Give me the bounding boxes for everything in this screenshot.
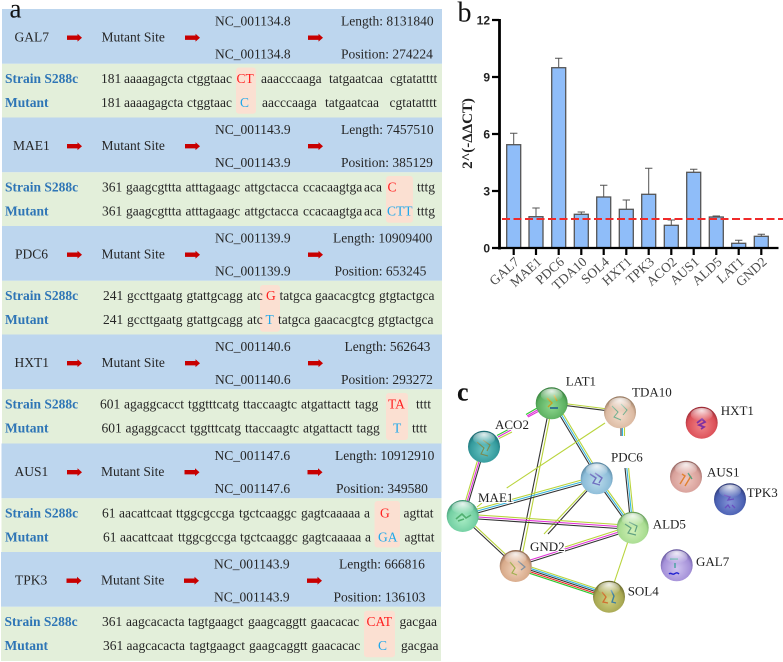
gene block: PDC6: Position: 653245	[334, 263, 427, 278]
panel c: protein interaction network	[447, 374, 778, 613]
gene block: TPK3	[1, 552, 441, 661]
gene block: PDC6: gccttgaatg	[127, 312, 183, 327]
gene block: GAL7: cgtatatttt	[390, 71, 437, 86]
gene block: GAL7: CT	[236, 71, 255, 86]
gene block: PDC6: atc	[247, 288, 263, 303]
gene block: HXT1: HXT1	[14, 355, 49, 370]
node labels	[478, 374, 778, 599]
gene block: HXT1: ttaccaagtc	[245, 420, 299, 436]
gene block: TPK3: Mutant	[4, 638, 49, 653]
y axis with ticks: 0	[483, 241, 490, 255]
gene block: MAE1: Position: 385129	[341, 155, 433, 170]
gene block: HXT1: tagg	[356, 420, 380, 436]
gene block: AUS1: ttggcgccga	[176, 506, 234, 520]
x axis with ticks	[498, 248, 778, 255]
network edges	[461, 402, 635, 600]
gene block: HXT1: agaggcacct	[124, 396, 184, 412]
node: ALD5	[617, 512, 649, 544]
x axis gene labels: SOL4	[578, 254, 612, 287]
gene block: MAE1: ccacaagtga	[303, 180, 362, 194]
gene block: MAE1: Strain S288c	[5, 180, 78, 194]
gene block: GAL7: NC_001134.8	[215, 14, 291, 28]
gene block: AUS1: NC_001147.6	[214, 448, 290, 463]
gene block: AUS1: agttat	[404, 530, 435, 544]
gene block: GAL7: 181	[101, 95, 121, 110]
gene block: GAL7: 181	[101, 71, 121, 86]
gene block: AUS1: a	[364, 506, 370, 520]
gene block: MAE1: aca	[364, 180, 382, 194]
gene block: TPK3: CAT	[366, 614, 393, 629]
gene block: TPK3: NC_001143.9	[214, 556, 290, 572]
gene block: PDC6: NC_001139.9	[215, 263, 291, 278]
gene block: AUS1: aacattcaat	[120, 530, 173, 544]
gene block: GAL7: tatgaatcaa	[329, 71, 383, 86]
node labels: SOL4	[628, 584, 659, 599]
gene block: HXT1: Mutant Site	[102, 355, 165, 370]
node: GAL7	[661, 549, 693, 581]
node: GND2	[500, 550, 532, 582]
gene block: HXT1: ttaccaagtc	[243, 396, 297, 412]
gene block: TPK3: Strain S288c	[4, 614, 78, 629]
gene block: AUS1: Length: 10912910	[335, 448, 435, 463]
gene block: AUS1: aacattcaat	[119, 506, 172, 520]
gene block: GAL7	[2, 9, 442, 118]
gene block: TPK3: tagtgaagct	[190, 638, 245, 653]
node: ACO2	[468, 431, 500, 463]
gene block: GAL7: aaaagagcta	[124, 71, 183, 86]
x axis gene labels: TDA10	[549, 254, 590, 293]
gene block: HXT1	[2, 334, 442, 444]
node labels: HXT1	[721, 403, 754, 418]
node: LAT1	[536, 387, 568, 419]
gene block: PDC6: T	[266, 312, 274, 327]
gene block: HXT1: NC_001140.6	[215, 372, 291, 387]
gene block: MAE1: atttagaagc	[186, 204, 240, 218]
node labels: GAL7	[696, 554, 730, 569]
gene block: AUS1: 61	[102, 506, 116, 520]
node labels: TPK3	[747, 485, 778, 500]
gene block: PDC6: gtattgcagg	[186, 312, 243, 327]
gene block: AUS1: agttat	[404, 506, 434, 520]
node: PDC6	[581, 462, 613, 494]
gene block: HXT1: 601	[102, 420, 122, 436]
gene block: PDC6: gtgtactgca	[379, 288, 434, 303]
gene block: MAE1: tttg	[417, 204, 435, 218]
gene block: HXT1: T	[393, 420, 402, 436]
panel letter c: c	[457, 378, 469, 407]
gene block: HXT1: tggtttcatg	[190, 420, 241, 436]
gene block: MAE1: Length: 7457510	[341, 122, 434, 137]
node labels: PDC6	[611, 450, 643, 465]
gene block: MAE1: Mutant	[5, 204, 49, 218]
panel a: mutation sites	[1, 9, 442, 661]
gene block: AUS1: G	[380, 506, 390, 520]
y axis with ticks: 12	[477, 13, 490, 27]
gene block: PDC6: 241	[103, 288, 123, 303]
gene block: PDC6	[2, 226, 442, 334]
x axis gene labels: TPK3	[623, 254, 657, 287]
gene block: HXT1: agaggcacct	[126, 420, 186, 436]
gene block: HXT1: 601	[100, 396, 120, 412]
gene block: HXT1: NC_001140.6	[215, 339, 291, 354]
gene block: PDC6: gaacacgtcg	[315, 288, 375, 303]
gene block: GAL7: aaacccaaga	[261, 71, 322, 86]
gene block: PDC6: Mutant	[5, 312, 49, 327]
gene block: GAL7: cgtatatttt	[390, 95, 437, 110]
gene block: PDC6: Mutant Site	[102, 246, 165, 262]
gene block: HXT1: atgattactt	[303, 420, 353, 436]
gene block: TPK3: gaacacac	[312, 638, 360, 653]
gene block: MAE1: Mutant Site	[102, 138, 165, 153]
gene block: GAL7: tatgaatcaa	[325, 95, 379, 110]
gene block: TPK3: aagcacacta	[126, 614, 184, 629]
node labels: ALD5	[653, 517, 686, 532]
gene block: MAE1: MAE1	[13, 138, 50, 153]
node labels: GND2	[530, 539, 565, 554]
gene block: MAE1: gaagcgttta	[126, 180, 181, 194]
gene block: TPK3: aagcacacta	[126, 638, 185, 653]
node: TPK3	[714, 483, 746, 515]
y axis with ticks: 9	[483, 70, 490, 84]
threshold dashed line	[502, 218, 783, 220]
node: SOL4	[593, 581, 625, 613]
gene block: HXT1: tttt	[412, 420, 427, 436]
gene block: HXT1: tagg	[355, 396, 378, 412]
gene block: GAL7: Strain S288c	[5, 71, 78, 86]
x axis gene labels: ALD5	[689, 254, 725, 288]
x axis gene labels: HXT1	[599, 254, 635, 288]
gene block: MAE1: gaagcgttta	[126, 204, 181, 218]
node: MAE1	[447, 500, 479, 532]
gene block: PDC6: gtattgcagg	[186, 288, 243, 303]
gene block: TPK3: Position: 136103	[334, 589, 426, 604]
gene block: MAE1: atttagaagc	[186, 180, 240, 194]
gene block: MAE1	[2, 118, 442, 226]
node: TDA10	[604, 396, 636, 428]
node labels: MAE1	[478, 490, 513, 505]
gene block: AUS1: AUS1	[14, 464, 48, 479]
gene block: TPK3: tagtgaagct	[188, 614, 244, 629]
y axis title: 2^(-ΔΔCT)	[460, 98, 476, 169]
x axis gene labels	[486, 254, 770, 293]
gene block: MAE1: 361	[102, 180, 122, 194]
node labels: AUS1	[707, 465, 740, 480]
gene block: GAL7: Position: 274224	[341, 46, 433, 61]
gene block: PDC6: Length: 10909400	[333, 230, 433, 246]
gene block: TPK3: C	[378, 638, 387, 653]
gene block: PDC6: tatgca	[278, 312, 310, 327]
gene block: AUS1: NC_001147.6	[214, 481, 290, 496]
panel b: bar chart	[458, 0, 783, 293]
gene block: PDC6: PDC6	[15, 246, 48, 262]
gene block: MAE1: NC_001143.9	[215, 122, 291, 137]
node: HXT1	[686, 407, 718, 439]
gene block: PDC6: tatgca	[280, 288, 312, 303]
gene block: AUS1: tgctcaaggc	[240, 530, 298, 544]
gene block: GAL7: aacccaaga	[262, 95, 317, 110]
gene block: AUS1: Position: 349580	[336, 481, 428, 496]
node labels: LAT1	[566, 374, 596, 389]
gene block: PDC6: gccttgaatg	[127, 288, 183, 303]
gene block: MAE1: attgctacca	[244, 204, 298, 218]
gene block: AUS1: Strain S288c	[5, 506, 78, 520]
gene block: GAL7: aaaagagcta	[124, 95, 183, 110]
gene block: TPK3: gaagcaggtt	[248, 614, 307, 629]
gene block: AUS1: gagtcaaaaa	[302, 530, 361, 544]
gene block: HXT1: Position: 293272	[341, 372, 433, 387]
gene block: AUS1: a	[365, 530, 371, 544]
gene block: AUS1: 61	[103, 530, 116, 544]
gene block: TPK3: 361	[103, 638, 123, 653]
bars with error bars	[507, 58, 768, 248]
gene block: GAL7: NC_001134.8	[215, 46, 291, 61]
gene block: PDC6: gaacacgtcg	[314, 312, 374, 327]
gene block: TPK3: TPK3	[15, 572, 48, 588]
gene block: TPK3: gacgaa	[401, 638, 438, 653]
gene block: MAE1: CTT	[387, 204, 413, 218]
y axis with ticks: 3	[483, 184, 490, 198]
y axis with ticks: 6	[483, 127, 490, 141]
gene block: GAL7: Mutant Site	[102, 30, 165, 44]
gene block: MAE1: NC_001143.9	[215, 155, 291, 170]
node labels: ACO2	[495, 417, 529, 432]
gene block: AUS1	[2, 444, 442, 552]
gene block: PDC6: NC_001139.9	[215, 230, 291, 246]
node labels: TDA10	[632, 385, 672, 400]
gene block: TPK3: gaagcaggtt	[249, 638, 308, 653]
gene block: TPK3: 361	[102, 614, 122, 629]
gene block: HXT1: TA	[388, 396, 405, 412]
gene block: MAE1: tttg	[417, 180, 435, 194]
gene block: TPK3: Mutant Site	[101, 572, 164, 588]
gene block: MAE1: aca	[364, 204, 382, 218]
y axis with ticks	[477, 13, 500, 255]
gene block: PDC6: 241	[103, 312, 123, 327]
gene block: AUS1: Mutant	[5, 530, 49, 544]
gene block: AUS1: gagtcaaaaa	[301, 506, 360, 520]
gene block: HXT1: tggtttcatg	[188, 396, 239, 412]
gene block: MAE1: C	[388, 180, 397, 194]
gene block: PDC6: G	[266, 288, 276, 303]
gene block: AUS1: tgctcaaggc	[239, 506, 297, 520]
gene block: AUS1: ttggcgccga	[178, 530, 236, 544]
gene block: PDC6: gtgtactgca	[378, 312, 433, 327]
gene block: PDC6: Strain S288c	[5, 288, 78, 303]
gene block: TPK3: gacgaa	[400, 614, 437, 629]
gene block: GAL7: ctggtaac	[187, 95, 232, 110]
x axis gene labels: AUS1	[667, 254, 702, 288]
gene block: MAE1: 361	[102, 204, 122, 218]
gene block: TPK3: NC_001143.9	[214, 589, 290, 604]
gene block: TPK3: Length: 666816	[339, 556, 425, 572]
node: AUS1	[670, 461, 702, 493]
gene block: GAL7: GAL7	[14, 30, 49, 44]
gene block: GAL7: C	[240, 95, 249, 110]
x axis gene labels: LAT1	[714, 254, 747, 286]
gene block: GAL7: ctggtaac	[187, 71, 232, 86]
gene block: HXT1: Mutant	[5, 420, 49, 436]
x axis gene labels: ACO2	[643, 254, 680, 289]
gene block: HXT1: atgattactt	[301, 396, 351, 412]
gene block: HXT1: Strain S288c	[5, 396, 78, 412]
x axis gene labels: GAL7	[486, 254, 522, 288]
gene block: MAE1: ccacaagtga	[303, 204, 362, 218]
gene block: MAE1: attgctacca	[244, 180, 298, 194]
gene block: GAL7: Length: 8131840	[341, 14, 434, 28]
x axis gene labels: GND2	[733, 254, 770, 289]
x axis gene labels: PDC6	[532, 254, 567, 287]
gene block: AUS1: Mutant Site	[101, 464, 164, 479]
gene block: AUS1: GA	[378, 530, 398, 544]
gene block: GAL7: Mutant	[5, 95, 49, 110]
gene block: PDC6: atc	[247, 312, 263, 327]
gene block: HXT1: Length: 562643	[344, 339, 431, 354]
x axis gene labels: MAE1	[507, 254, 544, 290]
gene block: TPK3: gaacacac	[310, 614, 359, 629]
gene block: HXT1: tttt	[416, 396, 431, 412]
